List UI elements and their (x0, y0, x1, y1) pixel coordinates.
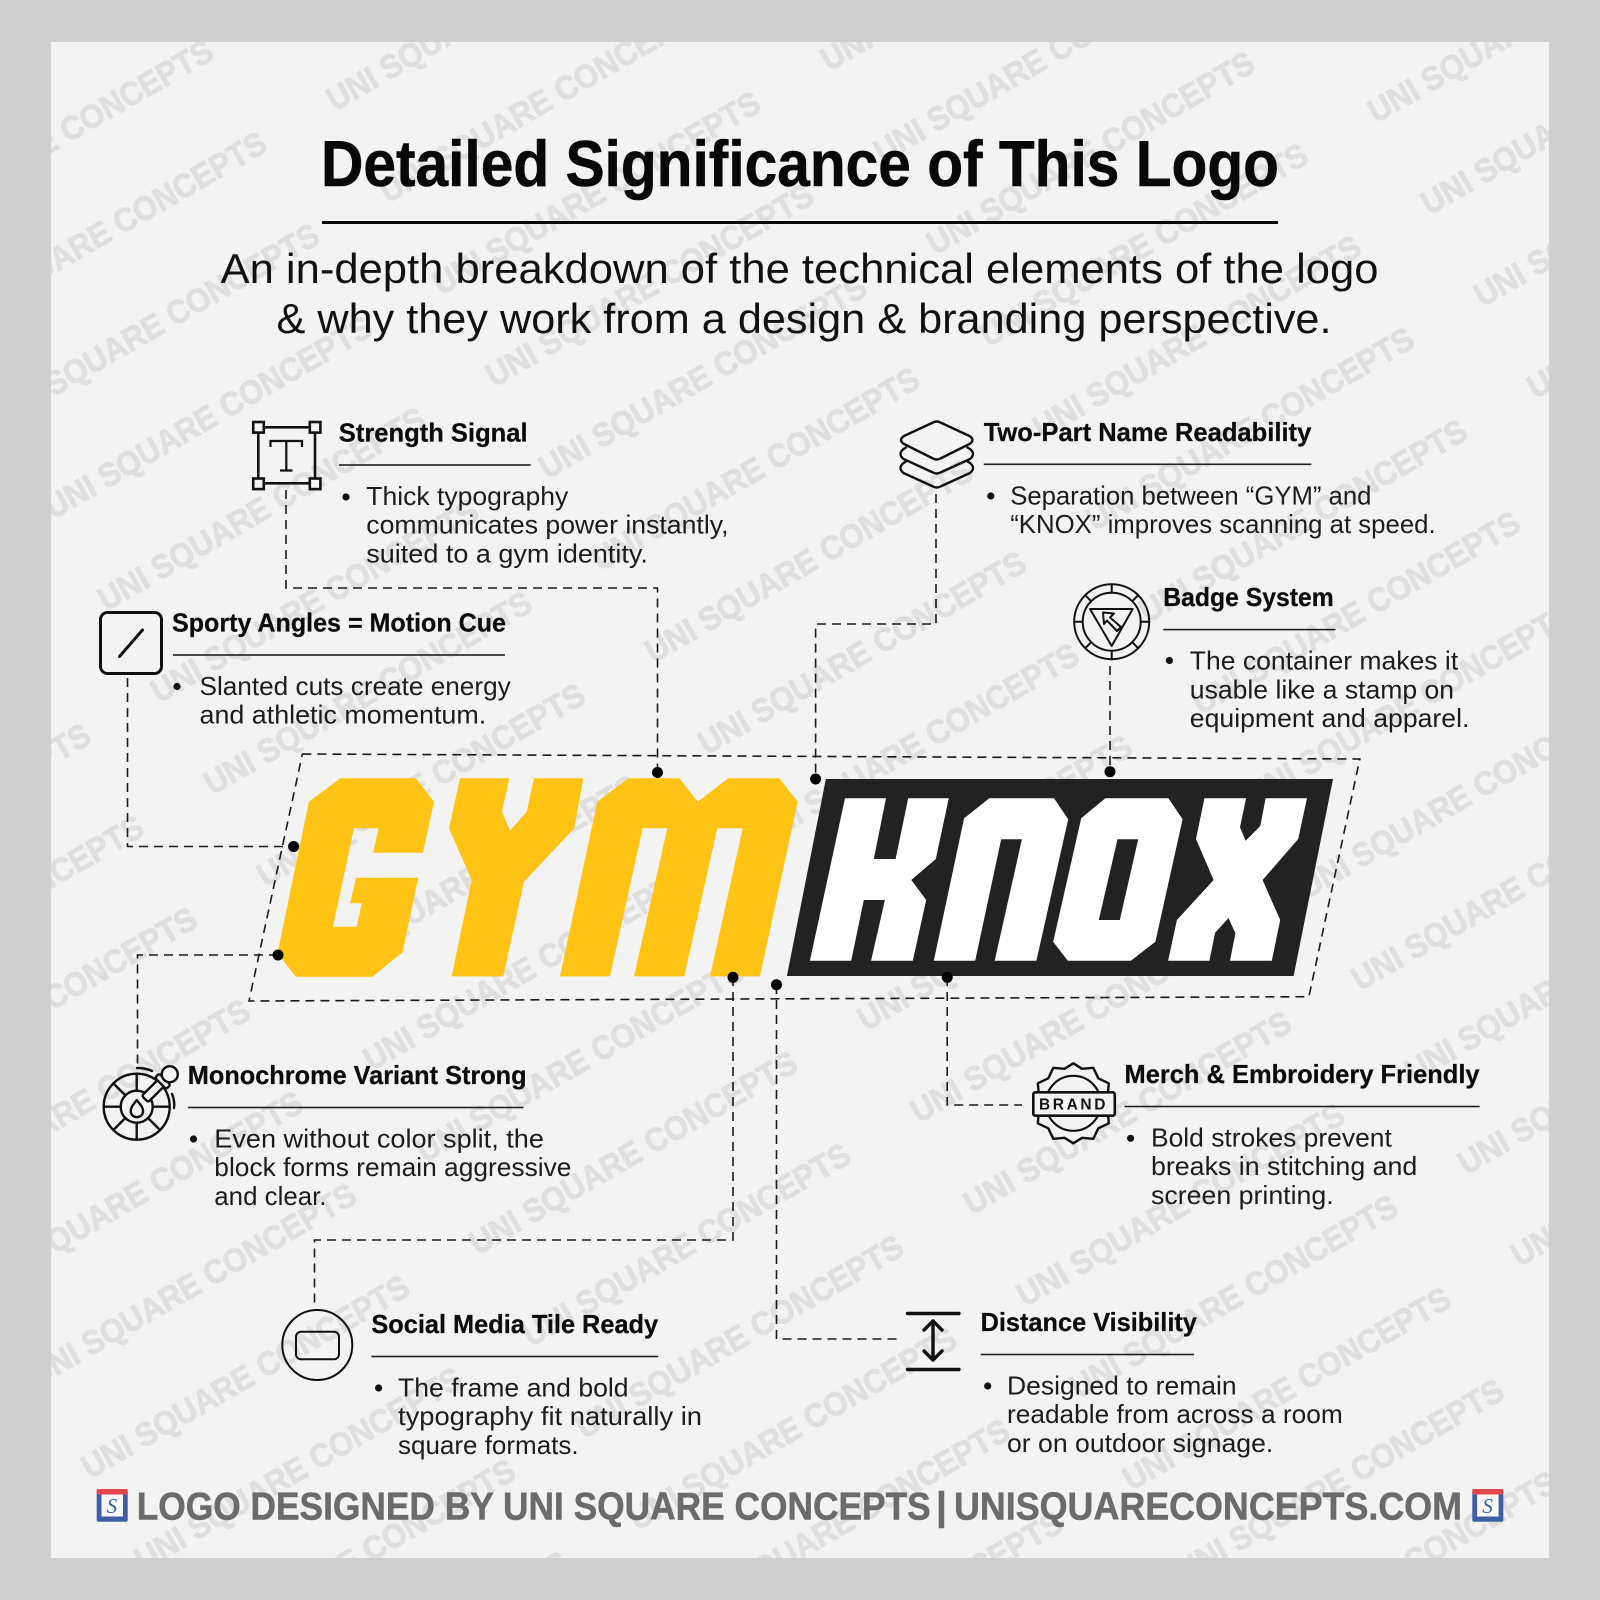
block: badge system (1163, 582, 1469, 733)
block: distance visibility: Designed to remain (1007, 1370, 1237, 1400)
logo: KNOX block (787, 779, 1333, 976)
block: distance visibility: readable from across a room (1007, 1399, 1343, 1429)
arrow: two-part leader (810, 494, 936, 784)
icon: brand stamp: BRAND (1039, 1096, 1108, 1114)
subtitle (220, 245, 1378, 342)
block: two-part name: “KNOX” improves scanning at speed. (1010, 509, 1436, 539)
arrow: distance leader (771, 979, 898, 1339)
block: strength signal: communicates power instantly, (366, 510, 728, 540)
block: monochrome variant (188, 1060, 571, 1211)
title (321, 127, 1279, 224)
block: strength signal: Thick typography (366, 481, 568, 511)
icon: round badge (1074, 584, 1149, 659)
icon: slanted square (100, 612, 162, 674)
icon: footer logo right (1472, 1489, 1503, 1522)
block: sporty angles: Slanted cuts create energy (200, 671, 511, 701)
arrow: monochrome leader (138, 950, 284, 1068)
block: social media tile: square formats. (398, 1430, 579, 1460)
block: social media tile (371, 1309, 702, 1460)
block: merch and embroidery (1124, 1059, 1480, 1210)
block: two-part name: Two-Part Name Readability (984, 417, 1312, 447)
icon: colour wheel and dropper (104, 1063, 181, 1140)
subtitle: An in-depth breakdown of the technical elements of the logo (220, 245, 1378, 292)
block: monochrome variant: block forms remain aggressive (214, 1152, 571, 1182)
footer credit: LOGO DESIGNED BY UNI SQUARE CONCEPTS (137, 1486, 931, 1528)
arrow: badge leader (1104, 666, 1116, 777)
block: two-part name: Separation between “GYM” and (1010, 480, 1371, 510)
block: strength signal (339, 418, 728, 568)
block: badge system: equipment and apparel. (1190, 703, 1469, 733)
arrow: strength signal leader (286, 490, 663, 778)
footer credit (137, 1486, 1462, 1528)
block: monochrome variant: Monochrome Variant Strong (188, 1060, 527, 1090)
block: social media tile: The frame and bold (398, 1372, 629, 1402)
block: social media tile: Social Media Tile Ready (371, 1309, 659, 1339)
block: sporty angles: and athletic momentum. (200, 700, 486, 730)
title: Detailed Significance of This Logo (321, 127, 1279, 200)
block: two-part name (984, 417, 1436, 539)
block: merch and embroidery: Merch & Embroidery Friendly (1124, 1059, 1480, 1089)
block: badge system: usable like a stamp on (1190, 674, 1454, 704)
icon: circle with rounded tile (282, 1310, 352, 1380)
arrow: merch leader (942, 972, 1022, 1105)
footer credit: UNISQUARECONCEPTS.COM (954, 1486, 1462, 1528)
icon: footer logo left (97, 1489, 128, 1522)
block: sporty angles (172, 608, 511, 730)
logo: GYM letters (278, 778, 798, 977)
block: sporty angles: Sporty Angles = Motion Cue (172, 608, 506, 638)
block: distance visibility: Distance Visibility (981, 1307, 1197, 1337)
arrow: sporty angles leader (128, 678, 299, 852)
icon: brand stamp (1033, 1063, 1115, 1143)
block: strength signal: Strength Signal (339, 418, 528, 448)
block: merch and embroidery: breaks in stitching and (1151, 1151, 1417, 1181)
icon: height arrows (908, 1314, 959, 1370)
block: merch and embroidery: screen printing. (1151, 1180, 1334, 1210)
block: social media tile: typography fit naturally in (398, 1401, 702, 1431)
block: strength signal: suited to a gym identity. (366, 538, 648, 568)
block: distance visibility (981, 1307, 1343, 1458)
block: monochrome variant: Even without color split, the (214, 1124, 544, 1154)
block: badge system: The container makes it (1190, 646, 1459, 676)
icon: stacked layers (900, 422, 973, 488)
arrow: social leader (314, 972, 738, 1303)
block: badge system: Badge System (1163, 582, 1334, 612)
icon: footer logo left: S (107, 1494, 118, 1518)
subtitle: & why they work from a design & branding perspective. (276, 295, 1332, 342)
block: monochrome variant: and clear. (214, 1181, 326, 1211)
block: merch and embroidery: Bold strokes prevent (1151, 1122, 1393, 1152)
icon: footer logo right: S (1482, 1494, 1493, 1518)
icon: text bounding box (253, 422, 320, 489)
dashed logo frame (249, 754, 1360, 1001)
block: distance visibility: or on outdoor signage. (1007, 1428, 1273, 1458)
footer credit: | (936, 1486, 947, 1528)
